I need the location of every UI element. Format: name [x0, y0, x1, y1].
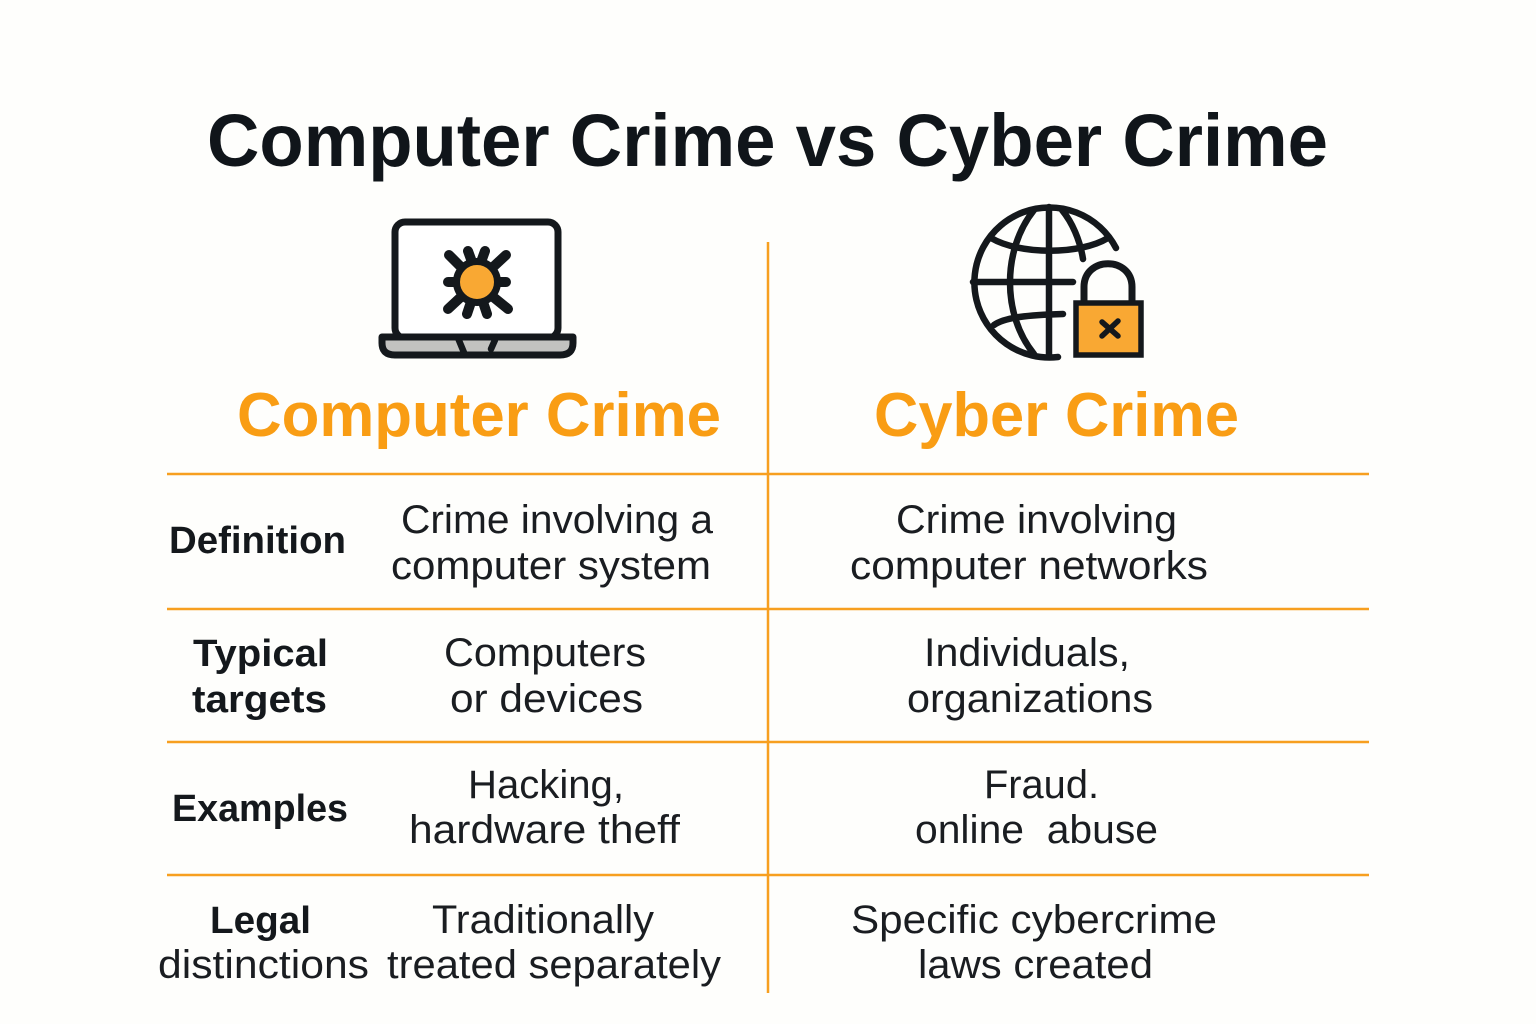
- column heading: Computer Crime: Computer Crime: [237, 381, 721, 450]
- cyber crime targets: Individuals,: [924, 631, 1130, 675]
- cyber crime legal treatment: laws created: [918, 943, 1153, 987]
- computer crime legal treatment: Traditionally: [432, 898, 654, 942]
- computer crime examples: [409, 763, 681, 852]
- computer crime legal treatment: [387, 898, 721, 987]
- cyber crime targets: [907, 631, 1153, 721]
- cyber crime legal treatment: [851, 898, 1217, 987]
- row label: Legal distinctions: [158, 900, 369, 987]
- cyber crime targets: organizations: [907, 677, 1153, 721]
- cyber crime definition: computer networks: [850, 544, 1208, 588]
- row: Examples: [172, 763, 1158, 852]
- computer crime targets: [444, 631, 646, 721]
- cyber crime definition: [850, 498, 1208, 588]
- title: Computer Crime vs Cyber Crime: [207, 99, 1328, 182]
- row: Legal distinctions: [158, 898, 1217, 987]
- cyber crime examples: [915, 763, 1158, 852]
- row label: Legal distinctions: Legal: [210, 900, 311, 942]
- row: Definition: [169, 498, 1208, 588]
- computer crime definition: computer system: [391, 544, 711, 588]
- computer crime examples: hardware theff: [409, 808, 681, 852]
- row label: Typical targets: Typical: [193, 633, 328, 675]
- row: Typical targets: [192, 631, 1153, 721]
- cyber crime examples: Fraud.: [984, 763, 1099, 807]
- row label: Definition: Definition: [169, 520, 346, 562]
- row label: Legal distinctions: distinctions: [158, 943, 369, 987]
- computer crime legal treatment: treated separately: [387, 943, 721, 987]
- icon: globe with padlock: [973, 207, 1141, 357]
- computer crime definition: [391, 498, 714, 588]
- cyber crime definition: Crime involving: [896, 498, 1177, 542]
- row label: Examples: Examples: [172, 788, 348, 830]
- cyber crime legal treatment: Specific cybercrime: [851, 898, 1217, 942]
- computer crime targets: Computers: [444, 631, 646, 675]
- computer crime examples: Hacking,: [468, 763, 624, 807]
- computer crime targets: or devices: [450, 677, 643, 721]
- cyber crime examples: online abuse: [915, 808, 1158, 852]
- column heading: Cyber Crime: Cyber Crime: [874, 381, 1239, 450]
- icon: laptop with bug: [382, 222, 573, 355]
- row label: Typical targets: [192, 633, 328, 721]
- row label: Typical targets: targets: [192, 679, 327, 721]
- computer crime definition: Crime involving a: [401, 498, 714, 542]
